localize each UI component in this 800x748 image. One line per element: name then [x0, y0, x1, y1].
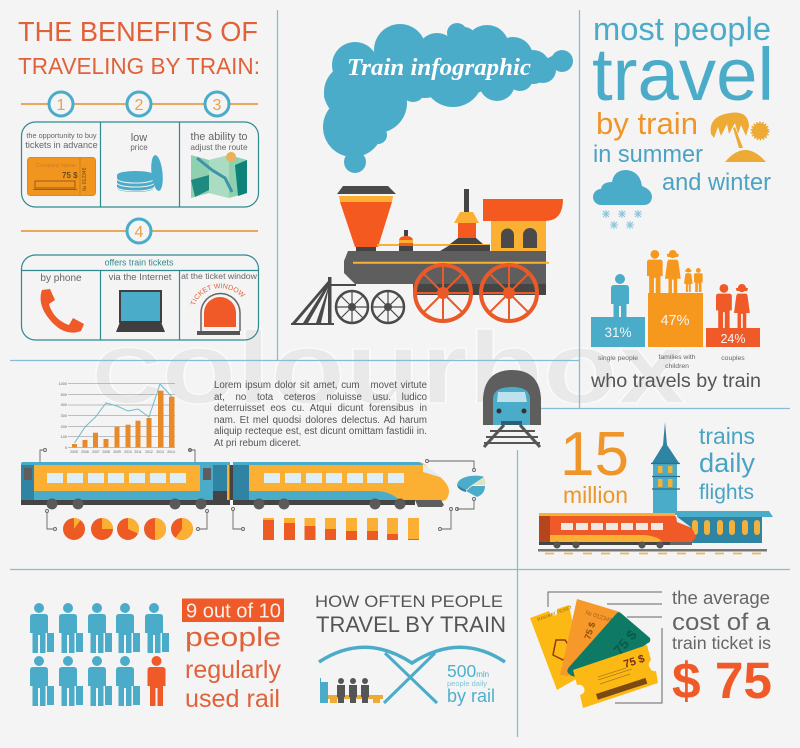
heading	[315, 592, 506, 637]
benefit text: buy in advance: tickets in advance	[25, 140, 98, 150]
icon: train in tunnel	[483, 370, 541, 447]
heading: TRAVEL BY TRAIN	[316, 612, 506, 637]
icon: palm island and sun	[711, 113, 768, 162]
bar: families with children: 47%	[660, 313, 690, 329]
pie charts row	[63, 518, 193, 540]
ticket: yellow back: RAILWAY TICKET	[537, 605, 573, 622]
channel labels: via the Internet	[109, 272, 172, 283]
numbered steps 1 2 3: 2	[135, 97, 144, 114]
statement text	[185, 622, 281, 713]
lorem ipsum text block: Lorem ipsum dolor sit amet, cum movet virtute	[214, 380, 427, 391]
high-speed train	[21, 462, 449, 510]
heading: HOW OFTEN PEOPLE	[315, 592, 503, 611]
red train	[539, 513, 696, 548]
icon: station canopy with passengers	[319, 647, 505, 703]
lorem ipsum text block: at, no tota ceteros noluisse usu. ludico	[214, 392, 427, 403]
cost text	[672, 587, 771, 653]
chimney	[337, 186, 396, 251]
trains daily flights: flights	[699, 481, 754, 504]
mini pie chart	[457, 476, 485, 497]
benefit text: buy in advance: the opportunity to buy	[26, 131, 97, 140]
icon: ticket: № 012345	[82, 167, 88, 191]
heading text: most people	[593, 11, 771, 47]
combo chart 2005-2014: 500	[61, 393, 67, 397]
combo chart 2005-2014: 2013	[156, 450, 164, 454]
lorem ipsum text block: nam. Et mel quodsi dolores delectus. Ad harum	[214, 415, 427, 426]
lorem ipsum text block: deterruisset eos cu. Atqui dicunt forensibus in	[214, 403, 427, 414]
benefit text: buy in advance	[25, 131, 98, 150]
panel: locomotive with smoke	[291, 23, 573, 325]
panel: how often people travel	[315, 592, 506, 706]
cab	[483, 199, 563, 251]
combo chart 2005-2014: 0	[65, 446, 67, 450]
bar chart: who travels by train	[590, 250, 761, 392]
statement text: regularly	[185, 656, 281, 684]
combo chart 2005-2014	[59, 382, 175, 454]
panel: 9 out of 10 people	[30, 598, 284, 713]
bar: families with children	[647, 250, 703, 370]
ticket: orange: № 012345	[584, 609, 614, 625]
combo chart 2005-2014: 2012	[145, 450, 153, 454]
cloud title: Train infographic	[347, 55, 531, 81]
connector lines	[40, 448, 476, 530]
ticket channels table	[20, 254, 260, 341]
chart caption: who travels by train	[590, 370, 761, 392]
cowcatcher	[291, 277, 356, 325]
price: $ 75	[672, 652, 772, 709]
boiler	[344, 251, 546, 295]
heading text	[592, 11, 774, 196]
step 4: 4	[135, 224, 144, 241]
trains daily flights: trains	[699, 423, 755, 449]
combo chart 2005-2014: 2008	[102, 450, 110, 454]
combo chart 2005-2014: 300	[61, 414, 67, 418]
channel labels: by phone	[40, 273, 82, 284]
trains daily flights: daily	[699, 448, 756, 478]
small dome	[399, 230, 413, 251]
ticket: yellow front: 75 $	[622, 653, 646, 671]
title: TRAVELING BY TRAIN:	[18, 53, 260, 79]
lorem ipsum text block: aliquip recteque est, est dicunt omittam fastidii in.	[214, 426, 427, 437]
benefit text: low price	[130, 132, 148, 152]
icon: laptop	[116, 291, 165, 332]
panel: chart and train	[21, 382, 485, 540]
bar: couples	[706, 284, 760, 362]
combo chart 2005-2014: 2007	[92, 450, 100, 454]
locomotive	[291, 186, 563, 325]
large wheels	[415, 265, 537, 321]
benefits table	[22, 122, 258, 207]
carriage two with nose	[233, 462, 449, 510]
ticket: orange	[560, 599, 620, 677]
benefit text: adjust route: adjust the route	[190, 142, 248, 152]
icon: ticket window	[190, 283, 246, 335]
icon: phone	[41, 289, 84, 333]
callout: 9 out of 10: 9 out of 10	[186, 600, 281, 622]
pictogram: people with luggage	[30, 603, 169, 706]
small wheels	[336, 291, 404, 323]
combo chart 2005-2014: 200	[61, 425, 67, 429]
watermark: Colourbox	[92, 311, 686, 425]
icon: ticket	[28, 158, 96, 196]
benefit text: low price: low	[131, 132, 147, 144]
500 mln stat: 500mln	[447, 661, 489, 681]
numbered steps 1 2 3: 3	[213, 97, 222, 114]
lorem ipsum text block	[214, 380, 427, 449]
steam cloud	[323, 23, 573, 173]
icon: coins	[117, 155, 164, 192]
icon: folded map	[191, 152, 247, 198]
500 mln stat	[447, 661, 495, 706]
numbered steps 1 2 3	[21, 92, 258, 116]
statement text: used rail	[185, 685, 280, 713]
trains daily flights	[699, 423, 756, 504]
number and unit: million	[563, 482, 628, 508]
benefit text: adjust route	[190, 131, 248, 152]
steam dome	[440, 189, 490, 251]
icon: ticket: 75 $	[62, 171, 78, 180]
benefit text: adjust route: the ability to	[190, 131, 248, 143]
bar: single people: 31%	[604, 325, 632, 340]
benefit text: low price: price	[130, 143, 148, 152]
combo chart 2005-2014: 2014	[167, 450, 175, 454]
cost text: the average	[672, 587, 770, 608]
500 mln stat: people daily	[447, 679, 487, 688]
combo chart 2005-2014: 2006	[81, 450, 89, 454]
bar: families with children: children	[665, 363, 689, 370]
heading text: travel	[592, 33, 774, 116]
title: THE BENEFITS OF	[18, 16, 258, 47]
channel labels	[40, 271, 258, 284]
ticket: green: 75 $	[610, 627, 640, 658]
combo chart 2005-2014: 2010	[124, 450, 132, 454]
combo chart 2005-2014: 2009	[113, 450, 121, 454]
ticket: orange: 75 $	[582, 621, 597, 641]
heading text: by train	[596, 107, 698, 141]
icon: ticket: Company Name	[36, 163, 76, 169]
coupling	[227, 465, 236, 500]
icon: snow cloud	[593, 170, 652, 229]
channels heading: offers train tickets	[105, 258, 174, 268]
numbered steps 1 2 3: 1	[57, 97, 66, 114]
panel: benefits of traveling by train	[18, 16, 260, 341]
heading text: and winter	[662, 170, 771, 196]
icon: ticket window: TICKET WINDOW	[190, 283, 246, 304]
bar: single people: single people	[598, 355, 638, 362]
combo chart 2005-2014: 400	[61, 403, 67, 407]
connector lines	[548, 592, 662, 703]
station with tower	[651, 422, 773, 543]
title	[18, 16, 260, 79]
combo chart 2005-2014: 2011	[134, 450, 142, 454]
lorem ipsum text block: At pri rebum diceret.	[214, 438, 301, 449]
step 4	[21, 219, 258, 243]
500 mln stat: by rail	[447, 686, 495, 706]
panel: 15 million trains	[538, 420, 773, 554]
carriage one	[21, 462, 230, 510]
bar: families with children: families with	[658, 354, 696, 361]
cost text: cost of a	[672, 609, 770, 636]
panel: most people travel	[590, 11, 774, 392]
bar: single people	[591, 274, 645, 362]
panel: average ticket cost	[530, 587, 772, 709]
stacked bars row	[263, 518, 419, 540]
number and unit: 15	[560, 420, 629, 489]
combo chart 2005-2014: 2005	[70, 450, 78, 454]
icon: fan of tickets	[530, 599, 658, 708]
channel labels: at the ticket window	[181, 271, 258, 281]
heading text: in summer	[593, 142, 703, 168]
combo chart 2005-2014: 100	[61, 435, 67, 439]
combo chart 2005-2014: 1000	[59, 382, 67, 386]
bar: couples: couples	[721, 355, 745, 362]
cost text: train ticket is	[672, 633, 771, 653]
bar: couples: 24%	[720, 332, 746, 346]
statement text: people	[185, 622, 281, 652]
railway track	[538, 549, 767, 554]
